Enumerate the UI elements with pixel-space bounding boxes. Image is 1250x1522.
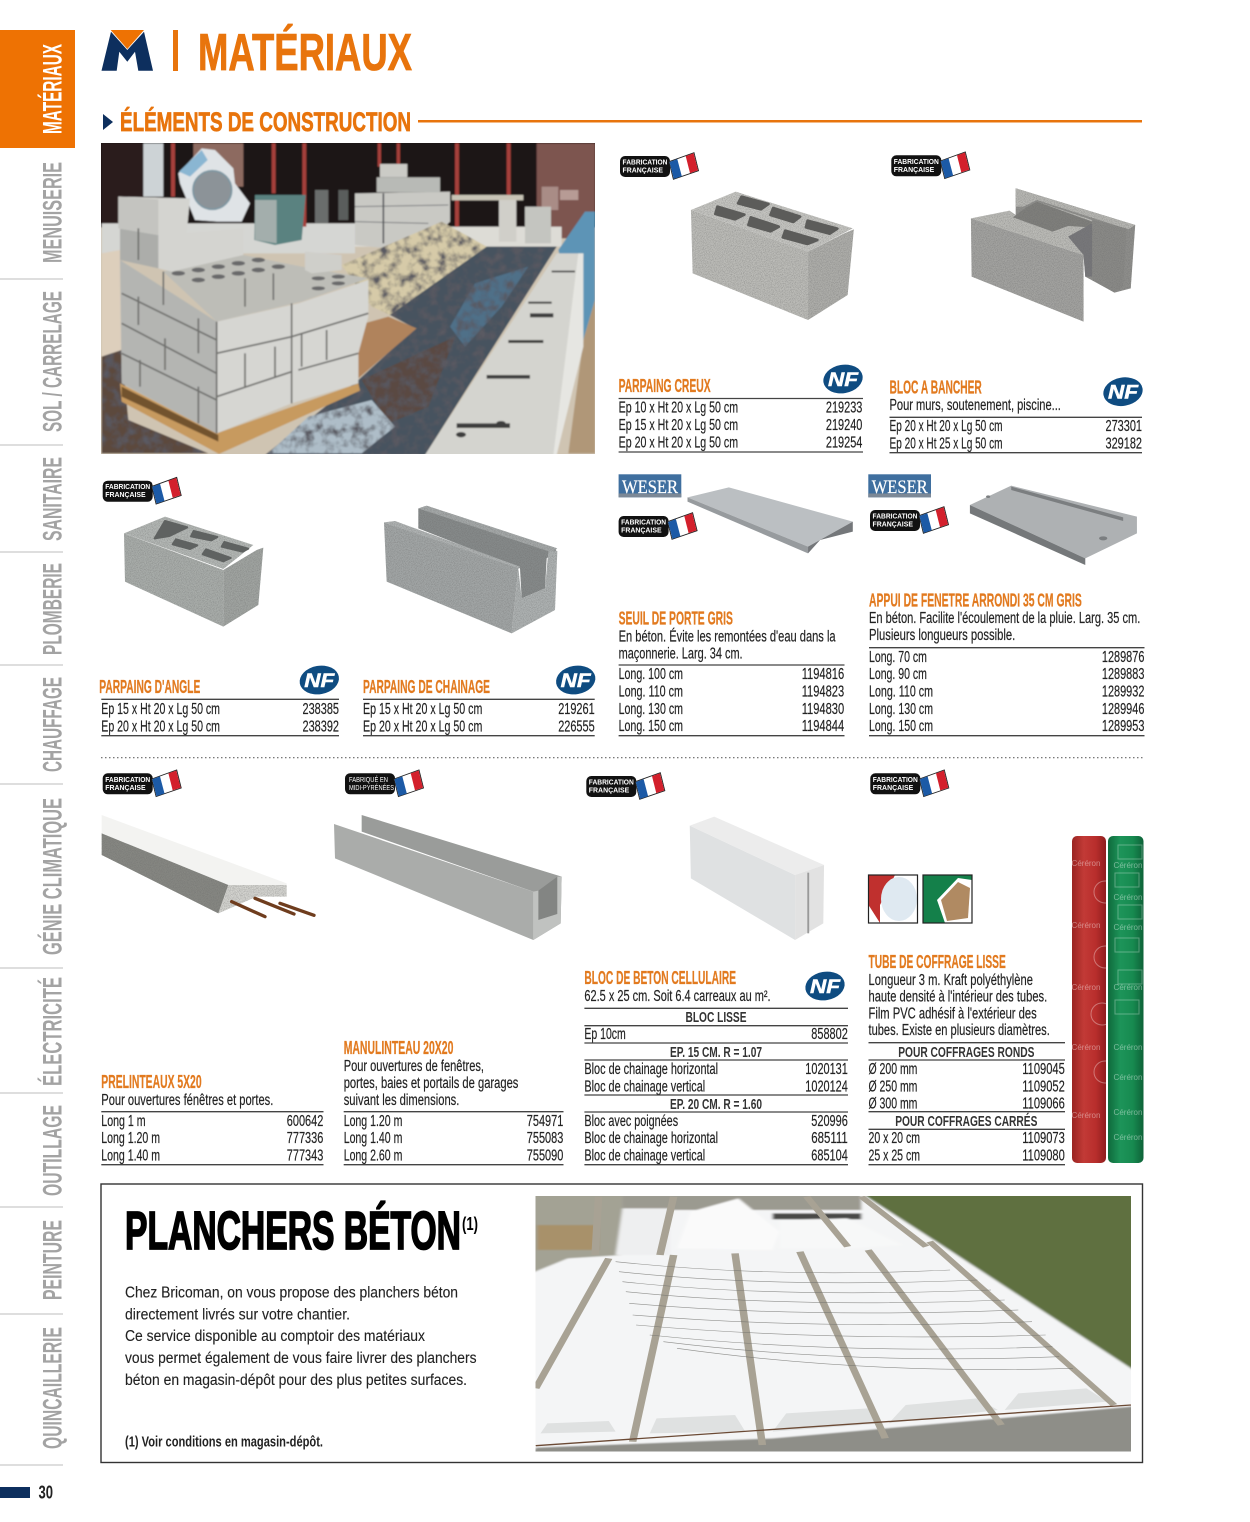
table: 226555	[558, 718, 595, 735]
body text: vous permet également de vous faire livrer des planchers	[125, 1350, 477, 1367]
table: EP. 20 CM. R = 1.60	[670, 1097, 762, 1113]
image: red and green tubes: Céréron	[1072, 983, 1100, 992]
table: 685111	[811, 1130, 848, 1147]
badge: NF	[297, 663, 341, 697]
table: 1020124	[805, 1079, 848, 1096]
table: 1109052	[1022, 1079, 1065, 1096]
badge: NF	[554, 663, 598, 697]
description: Pour murs, soutenement, piscine...	[890, 397, 1061, 414]
badge: fabrication française: FABRICATION	[894, 157, 939, 166]
table: Long 1 m	[101, 1113, 146, 1130]
table: 219254	[826, 435, 863, 452]
product: bloc à bancher	[890, 152, 1145, 453]
table: Ep 20 x Ht 20 x Lg 50 cm	[619, 435, 738, 452]
table	[869, 648, 1144, 736]
table: Bloc avec poignées	[584, 1113, 678, 1130]
badge: NF: NF	[828, 370, 860, 391]
image: red and green tubes: Céréron	[1072, 859, 1100, 868]
image: red and green tubes: Céréron	[1114, 893, 1142, 902]
product: parpaing creux	[619, 153, 865, 452]
badge: fabrication française: FRANÇAISE	[105, 490, 146, 499]
title: PARPAING CREUX	[619, 376, 711, 396]
table: Ep 15 x Ht 20 x Lg 50 cm	[101, 701, 220, 718]
page number	[0, 1482, 53, 1502]
table	[584, 1008, 848, 1165]
badge: fabrication française: FRANÇAISE	[894, 165, 934, 174]
thumbnail: round tube	[868, 875, 918, 923]
table: Long. 130 cm	[869, 701, 933, 718]
title: PRELINTEAUX 5X20	[101, 1072, 202, 1092]
badge: fabrication française: FRANÇAISE	[622, 166, 663, 174]
image: reinforced lintel	[102, 815, 314, 917]
title: SEUIL DE PORTE GRIS	[619, 609, 733, 629]
badge: fabriqué en Midi-Pyrénées	[345, 770, 424, 797]
image: aerated concrete block	[690, 817, 824, 940]
image: red and green tubes: Céréron	[1072, 1043, 1100, 1052]
image: red and green tubes: Céréron	[1072, 921, 1100, 930]
description	[868, 972, 1050, 1039]
footnote: (1) Voir conditions en magasin-dépôt.	[125, 1434, 323, 1451]
body text: directement livrés sur votre chantier.	[125, 1307, 350, 1324]
body text	[125, 1285, 477, 1389]
description	[869, 610, 1140, 644]
tab labels: SOL / CARRELAGE	[38, 291, 68, 432]
description: Film PVC adhésif à l'extérieur des	[868, 1005, 1037, 1022]
tab labels: GÉNIE CLIMATIQUE	[38, 798, 68, 955]
logo: Weser: WESER	[622, 477, 678, 498]
badge: NF	[821, 362, 865, 396]
badge: fabrication française	[870, 507, 948, 533]
table: Ø 250 mm	[868, 1079, 917, 1096]
badge: fabrication française: FABRICATION	[873, 775, 918, 784]
table: Long. 130 cm	[619, 701, 683, 718]
table: 238392	[302, 718, 339, 735]
image: red and green tubes: Céréron	[1114, 983, 1142, 992]
table: Ep 20 x Ht 25 x Lg 50 cm	[890, 435, 1002, 452]
table	[344, 1112, 564, 1165]
badge: fabrication française	[586, 773, 665, 799]
logo M	[102, 30, 153, 71]
image: red and green tubes: Céréron	[1114, 1133, 1142, 1142]
table: EP. 15 CM. R = 1.07	[670, 1045, 762, 1061]
description: portes, baies et portails de garages	[344, 1075, 519, 1092]
badge: NF	[1101, 374, 1145, 409]
table: Ep 10cm	[584, 1026, 626, 1043]
image: hollow concrete block	[691, 192, 854, 320]
title: APPUI DE FENETRE ARRONDI 35 CM GRIS	[869, 590, 1082, 610]
table: Long. 100 cm	[619, 666, 683, 683]
table: 754971	[527, 1113, 563, 1130]
tab labels: ÉLECTRICITÉ	[38, 977, 68, 1086]
badge: fabrication française: FRANÇAISE	[873, 783, 913, 792]
page number: 30	[38, 1482, 53, 1502]
description	[619, 628, 836, 662]
description: Plusieurs longueurs possible.	[869, 627, 1015, 644]
image: red and green tubes: Céréron	[1114, 861, 1142, 870]
table: Bloc de chainage vertical	[584, 1148, 705, 1165]
table: 600642	[287, 1113, 323, 1130]
table: 1194844	[802, 718, 844, 735]
tab labels: SANITAIRE	[38, 457, 68, 541]
badge: NF: NF	[561, 671, 592, 692]
image: red and green tubes: Céréron	[1072, 1111, 1100, 1120]
table: Long. 110 cm	[619, 683, 683, 700]
active tab: matériaux	[0, 30, 75, 148]
image: red and green tubes	[1072, 836, 1144, 1163]
tab labels: PLOMBERIE	[38, 563, 68, 655]
table: 685104	[811, 1148, 848, 1165]
table	[619, 665, 844, 736]
table: 1289946	[1102, 701, 1144, 718]
table: 238385	[302, 701, 339, 718]
table: Bloc de chainage horizontal	[584, 1061, 718, 1078]
body text: Ce service disponible au comptoir des matériaux	[125, 1328, 425, 1345]
title: MATÉRIAUX	[198, 24, 412, 82]
badge: fabrication française: FABRICATION	[621, 518, 666, 526]
description: Pour ouvertures fénêtres et portes.	[101, 1092, 273, 1109]
table: Long 1.40 m	[344, 1130, 402, 1147]
badge: fabrication française	[103, 477, 181, 504]
product: parpaing de chainage	[363, 506, 598, 736]
tab labels: MENUISERIE	[38, 162, 68, 263]
table: Long. 110 cm	[869, 683, 933, 700]
table: 777343	[287, 1148, 323, 1165]
description: Pour ouvertures de fenêtres,	[344, 1058, 484, 1075]
table: 329182	[1106, 435, 1142, 452]
body text: Chez Bricoman, on vous propose des planchers béton	[125, 1285, 458, 1302]
badge: fabrication française	[619, 513, 697, 539]
image: corner block	[124, 517, 263, 627]
table: Ep 20 x Ht 20 x Lg 50 cm	[363, 718, 482, 735]
product: tube de coffrage lisse	[868, 770, 1144, 1165]
table: Ep 15 x Ht 20 x Lg 50 cm	[619, 417, 738, 434]
badge: fabrication française: FRANÇAISE	[105, 783, 146, 792]
badge: fabrication française: FRANÇAISE	[621, 526, 662, 534]
badge: fabrication française: FABRICATION	[872, 512, 918, 520]
badge: NF: NF	[304, 671, 336, 692]
table: Long 1.20 m	[344, 1113, 402, 1130]
table: 858802	[811, 1026, 848, 1043]
table: 1289876	[1102, 649, 1144, 666]
image: formwork block	[971, 188, 1135, 322]
description	[344, 1058, 519, 1109]
description: haute densité à l'intérieur des tubes.	[868, 988, 1047, 1005]
badge: fabrication française: FRANÇAISE	[872, 520, 913, 528]
description: Longueur 3 m. Kraft polyéthylène	[868, 972, 1033, 989]
table: Long 2.60 m	[344, 1148, 402, 1165]
table: Long 1.40 m	[101, 1148, 160, 1165]
product: manulinteau	[334, 770, 564, 1165]
description: En béton. Facilite l'écoulement de la pluie. Larg. 35 cm.	[869, 610, 1140, 627]
tab labels: QUINCAILLERIE	[38, 1327, 68, 1449]
table: POUR COFFRAGES RONDS	[898, 1045, 1035, 1061]
table	[363, 699, 595, 736]
image: window sill	[970, 486, 1137, 565]
table: 219233	[826, 400, 862, 417]
title: MANULINTEAU 20X20	[344, 1038, 453, 1058]
table: Ep 20 x Ht 20 x Lg 50 cm	[890, 418, 1002, 435]
section heading: ÉLÉMENTS DE CONSTRUCTION	[120, 106, 411, 137]
table: 1020131	[805, 1061, 848, 1078]
table: 1194816	[802, 666, 844, 683]
table	[101, 699, 339, 736]
description: En béton. Évite les remontées d'eau dans la	[619, 628, 836, 645]
table: Long. 70 cm	[869, 649, 927, 666]
table: 1109045	[1022, 1061, 1065, 1078]
title: BLOC A BANCHER	[890, 378, 982, 398]
table: 1194830	[802, 701, 844, 718]
title	[173, 24, 412, 82]
table: 520996	[811, 1113, 848, 1130]
table: Long. 150 cm	[619, 718, 683, 735]
heading: PLANCHERS BÉTON	[125, 1201, 461, 1261]
title: PARPAING D'ANGLE	[99, 677, 200, 697]
product: parpaing d'angle	[99, 477, 341, 736]
product: prélinteaux	[101, 770, 324, 1165]
table: Ep 10 x Ht 20 x Lg 50 cm	[619, 400, 738, 417]
tab labels	[0, 162, 68, 1465]
title: PARPAING DE CHAINAGE	[363, 677, 490, 697]
table: Long 1.20 m	[101, 1130, 160, 1147]
image: red and green tubes: Céréron	[1114, 1108, 1142, 1117]
table: 1289932	[1102, 683, 1144, 700]
badge: NF	[803, 969, 847, 1003]
description: 62.5 x 25 cm. Soit 6.4 carreaux au m².	[584, 988, 771, 1005]
table	[101, 1112, 324, 1165]
table: 1109066	[1022, 1096, 1065, 1113]
title: BLOC DE BETON CELLULAIRE	[584, 968, 736, 988]
table: POUR COFFRAGES CARRÉS	[895, 1113, 1038, 1130]
sidebar navigation	[0, 30, 75, 1465]
table: Ø 300 mm	[868, 1096, 917, 1113]
table: 1109080	[1022, 1148, 1065, 1165]
table: 1289883	[1102, 666, 1144, 683]
body text: béton en magasin-dépôt pour des plus petites surfaces.	[125, 1372, 467, 1389]
section heading	[103, 106, 1142, 137]
tab labels: PEINTURE	[38, 1220, 68, 1300]
table	[890, 417, 1142, 453]
photo: concrete floor slab	[527, 1192, 1141, 1458]
tab labels: CHAUFFAGE	[38, 677, 68, 772]
description: suivant les dimensions.	[344, 1092, 459, 1109]
image: red and green tubes: Céréron	[1114, 1043, 1142, 1052]
table: 20 x 20 cm	[868, 1130, 920, 1147]
badge: fabrication française: FRANÇAISE	[589, 786, 629, 794]
table: 219240	[826, 417, 863, 434]
table: 1194823	[802, 683, 844, 700]
badge: fabrication française	[103, 770, 181, 797]
badge: NF: NF	[1108, 383, 1140, 404]
badge: NF: NF	[810, 977, 842, 998]
image: red and green tubes: Céréron	[1114, 1073, 1142, 1082]
tab labels: OUTILLAGE	[38, 1105, 68, 1196]
table: 777336	[287, 1130, 323, 1147]
table: Long. 150 cm	[869, 718, 933, 735]
badge: fabrication française: FABRICATION	[105, 482, 150, 491]
product: seuil de porte gris	[619, 474, 853, 736]
panel: planchers béton	[101, 1184, 1142, 1462]
image: red and green tubes: Céréron	[1114, 923, 1142, 932]
image: U lintel	[334, 815, 562, 940]
table: 273301	[1106, 418, 1142, 435]
badge: fabrication française	[891, 152, 970, 179]
table: Bloc de chainage horizontal	[584, 1130, 718, 1147]
table: 1289953	[1102, 718, 1144, 735]
title: TUBE DE COFFRAGE LISSE	[868, 952, 1006, 972]
table: 25 x 25 cm	[868, 1148, 920, 1165]
photo: construction site with blocks	[95, 140, 605, 460]
table: BLOC LISSE	[686, 1010, 747, 1026]
image: U-shaped block	[384, 506, 557, 633]
table: Long. 90 cm	[869, 666, 927, 683]
table	[619, 398, 863, 452]
table: 219261	[558, 701, 595, 718]
table: Ep 20 x Ht 20 x Lg 50 cm	[101, 718, 220, 735]
badge: fabrication française	[870, 770, 949, 797]
table: 1109073	[1022, 1130, 1065, 1147]
description: tubes. Existe en plusieurs diamètres.	[868, 1022, 1050, 1039]
logo: Weser: WESER	[872, 477, 928, 498]
badge: fabrication française: FABRICATION	[105, 775, 150, 784]
badge: fabrication française	[620, 153, 698, 179]
table: 755083	[527, 1130, 563, 1147]
badge: fabrication française: FABRICATION	[589, 778, 634, 786]
table: Bloc de chainage vertical	[584, 1079, 705, 1096]
table	[868, 1043, 1065, 1165]
thumbnail: square tube	[923, 875, 972, 923]
table: Ep 15 x Ht 20 x Lg 50 cm	[363, 701, 482, 718]
image: door sill	[687, 487, 853, 553]
badge: fabrication française: FABRICATION	[622, 158, 668, 166]
table: 755090	[527, 1148, 564, 1165]
badge: fabriqué en Midi-Pyrénées: FABRIQUÉ EN	[349, 775, 388, 784]
badge: fabriqué en Midi-Pyrénées: MIDI-PYRÉNÉES	[349, 783, 394, 792]
product: appui de fenêtre arrondi	[868, 474, 1144, 736]
product: bloc de béton cellulaire	[584, 773, 848, 1165]
description: maçonnerie. Larg. 34 cm.	[619, 645, 743, 662]
table: Ø 200 mm	[868, 1061, 917, 1078]
footnote marker: (1)	[462, 1214, 478, 1234]
